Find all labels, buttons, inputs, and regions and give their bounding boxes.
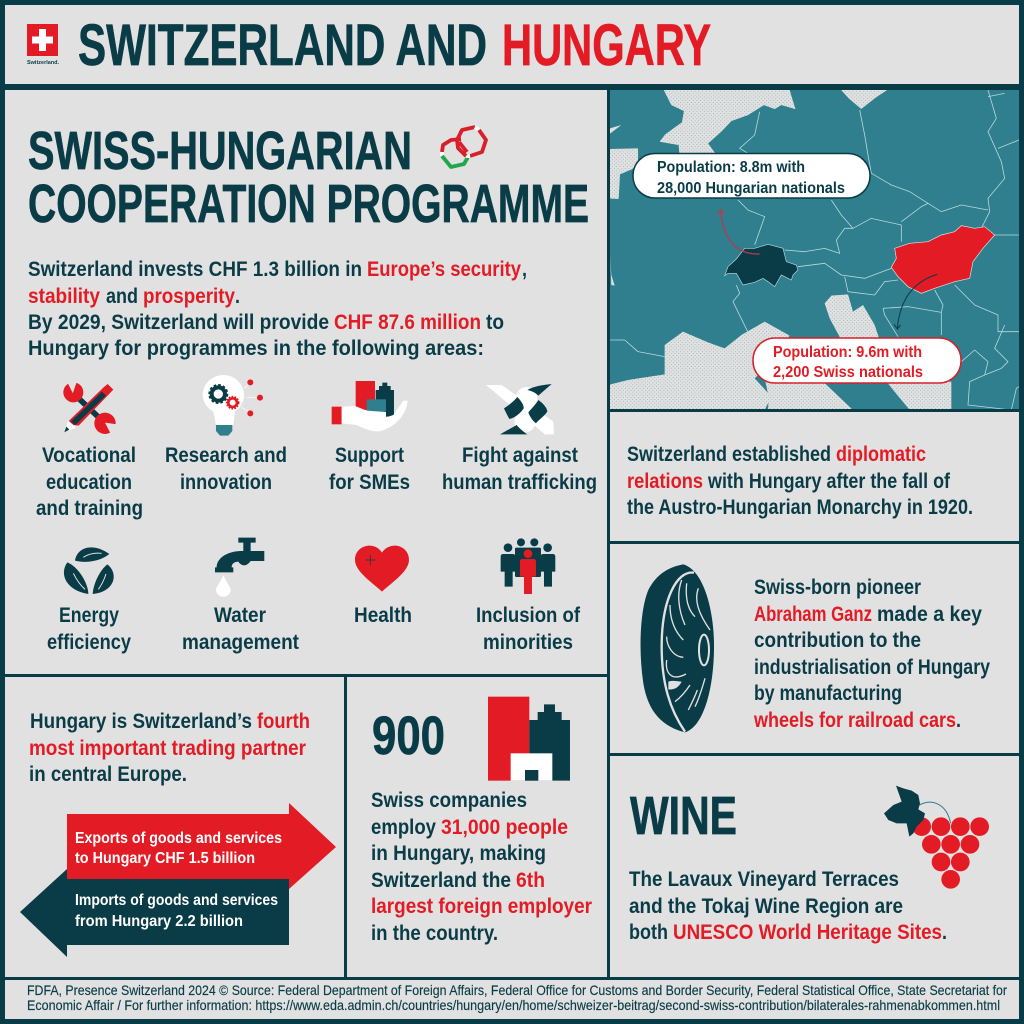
- label: vocational education and training: and training: [36, 497, 143, 520]
- label: water management: [182, 604, 299, 654]
- text block: trading partner: in central Europe.: [29, 763, 187, 786]
- callout: Hungarian population: [753, 338, 961, 383]
- callout: Hungarian population: Population: 9.6m with: [773, 344, 922, 361]
- heading: cooperation programme: [28, 121, 589, 234]
- text block: introduction: .: [235, 285, 240, 308]
- text block: introduction: By 2029, Switzerland will provide: [28, 311, 329, 334]
- label: fight against human trafficking: [442, 444, 597, 494]
- text block: introduction: to: [486, 311, 504, 334]
- label: support for SMEs: [329, 444, 410, 494]
- map: Hungary: [891, 226, 995, 293]
- text block: trading partner: most important trading partner: [29, 737, 306, 760]
- text block: Abraham Ganz: [753, 576, 990, 732]
- arrow: exports: to Hungary CHF 1.5 billion: [75, 850, 255, 867]
- text block: UNESCO sites: [629, 868, 947, 944]
- icon: research light bulb: [203, 375, 263, 436]
- icon: fight against human trafficking: [486, 384, 554, 434]
- text block: trading partner: Hungary is Switzerland’s: [30, 710, 252, 733]
- panel: wine: [610, 756, 1019, 977]
- label: research and innovation: innovation: [180, 471, 272, 494]
- text block: employers: [371, 789, 592, 945]
- text block: trading partner: fourth: [257, 710, 310, 733]
- label: energy efficiency: Energy: [59, 604, 119, 627]
- text block: UNESCO sites: The Lavaux Vineyard Terraces: [629, 868, 899, 891]
- label: vocational education and training: education: [46, 471, 132, 494]
- label: fight against human trafficking: human trafficking: [442, 471, 597, 494]
- icon: Swiss flag logo: [27, 24, 59, 66]
- label: energy efficiency: efficiency: [47, 631, 131, 654]
- panel: Abraham Ganz: [610, 544, 1019, 753]
- text block: employers: in the country.: [371, 922, 498, 945]
- heading: cooperation programme: COOPERATION PROGRAMME: [28, 174, 589, 234]
- label: inclusion of minorities: Inclusion of: [476, 604, 581, 627]
- arrow: imports: from Hungary 2.2 billion: [75, 913, 243, 930]
- panel: cooperation programme: [5, 90, 607, 674]
- text block: diplomatic relations: [627, 443, 973, 519]
- text block: introduction: ,: [522, 258, 527, 281]
- panel: diplomatic relations: [610, 412, 1019, 541]
- icon: Swiss flag logo: Switzerland.: [27, 60, 59, 66]
- text block: employers: 6th: [516, 869, 545, 892]
- icon: inclusion people: [501, 538, 555, 594]
- text block: introduction: prosperity: [143, 285, 235, 308]
- label: support for SMEs: for SMEs: [329, 471, 410, 494]
- heading: wine: WINE: [630, 786, 737, 846]
- text block: Abraham Ganz: wheels for railroad cars: [753, 709, 956, 732]
- text block: Abraham Ganz: .: [956, 709, 961, 732]
- callout: Swiss population: Population: 8.8m with: [657, 159, 805, 176]
- label: support for SMEs: Support: [335, 444, 404, 467]
- text block: UNESCO sites: UNESCO World Heritage Sites: [673, 921, 942, 944]
- text block: diplomatic relations: diplomatic: [836, 443, 926, 466]
- text block: employers: 31,000 people: [441, 816, 568, 839]
- icon: linked hexagons: [442, 127, 486, 167]
- label: research and innovation: Research and: [165, 444, 287, 467]
- callout: Hungarian population: 2,200 Swiss nationals: [773, 364, 923, 381]
- panel: companies: [347, 677, 607, 977]
- text block: introduction: Europe’s security: [367, 258, 521, 281]
- text block: introduction: stability: [28, 285, 100, 308]
- text block: employers: largest foreign employer: [371, 895, 592, 918]
- text block: Abraham Ganz: by manufacturing: [754, 682, 902, 705]
- icon: health heart: [355, 546, 409, 592]
- text block: diplomatic relations: relations: [627, 470, 703, 493]
- title: HUNGARY: [502, 13, 711, 78]
- text block: employers: in Hungary, making: [371, 842, 546, 865]
- text block: trading partner: [29, 710, 310, 786]
- label: fight against human trafficking: Fight against: [462, 444, 578, 467]
- icon: water tap: [215, 538, 264, 597]
- arrow: exports: [67, 803, 336, 889]
- label: health: Health: [354, 604, 412, 627]
- label: inclusion of minorities: minorities: [483, 631, 573, 654]
- callout: Swiss population: 28,000 Hungarian nationals: [657, 180, 845, 197]
- panel: header: [5, 5, 1019, 84]
- text block: employers: employ: [371, 816, 436, 839]
- label: water management: management: [182, 631, 299, 654]
- arrow: Switzerland population: [717, 210, 760, 254]
- text block: employers: Switzerland the: [371, 869, 511, 892]
- arrow: imports: Imports of goods and services: [75, 892, 278, 909]
- label: vocational education and training: [36, 444, 143, 520]
- label: research and innovation: [165, 444, 287, 494]
- text block: Abraham Ganz: contribution to the: [754, 629, 921, 652]
- heading: cooperation programme: SWISS-HUNGARIAN: [28, 121, 412, 181]
- text block: UNESCO sites: both: [629, 921, 668, 944]
- label: water management: Water: [214, 604, 266, 627]
- icon: grapes: [884, 786, 989, 889]
- text block: diplomatic relations: the Austro-Hungarian Monarchy in 1920.: [627, 496, 973, 519]
- text block: introduction: [28, 258, 527, 360]
- icon: railroad wheel: [641, 564, 714, 732]
- icon: energy efficiency leaves: [64, 547, 114, 594]
- text block: introduction: CHF 87.6 million: [334, 311, 481, 334]
- map: Switzerland: [725, 244, 798, 287]
- panel: trade: [5, 677, 344, 977]
- number: 900 companies: 900: [372, 706, 445, 766]
- text block: Abraham Ganz: Abraham Ganz: [754, 603, 872, 626]
- text block: sources: [27, 982, 1007, 1013]
- text block: UNESCO sites: .: [942, 921, 947, 944]
- panel: footer: [5, 980, 1019, 1019]
- text block: Abraham Ganz: made a key: [877, 603, 982, 626]
- icon: buildings: [488, 697, 570, 781]
- arrow: exports: Exports of goods and services: [75, 830, 282, 847]
- arrow: imports: [20, 869, 289, 957]
- label: vocational education and training: Vocational: [42, 444, 136, 467]
- label: energy efficiency: [47, 604, 131, 654]
- text block: introduction: Hungary for programmes in the following areas:: [28, 337, 484, 360]
- title: SWITZERLAND AND: [78, 13, 487, 78]
- text block: diplomatic relations: with Hungary after the fall of: [707, 470, 951, 493]
- arrow: Hungary population: [894, 274, 937, 329]
- text block: diplomatic relations: Switzerland established: [627, 443, 831, 466]
- label: inclusion of minorities: [476, 604, 581, 654]
- text block: introduction: Switzerland invests CHF 1.3 billion in: [28, 258, 362, 281]
- panel: map: [608, 85, 1021, 412]
- text block: UNESCO sites: and the Tokaj Wine Region are: [629, 895, 903, 918]
- icon: support for SMEs hand: [332, 381, 408, 431]
- text block: introduction: and: [106, 285, 138, 308]
- icon: vocational tools: [63, 376, 117, 436]
- callout: Swiss population: [633, 154, 870, 198]
- text block: employers: Swiss companies: [371, 789, 527, 812]
- text block: Abraham Ganz: Swiss-born pioneer: [754, 576, 921, 599]
